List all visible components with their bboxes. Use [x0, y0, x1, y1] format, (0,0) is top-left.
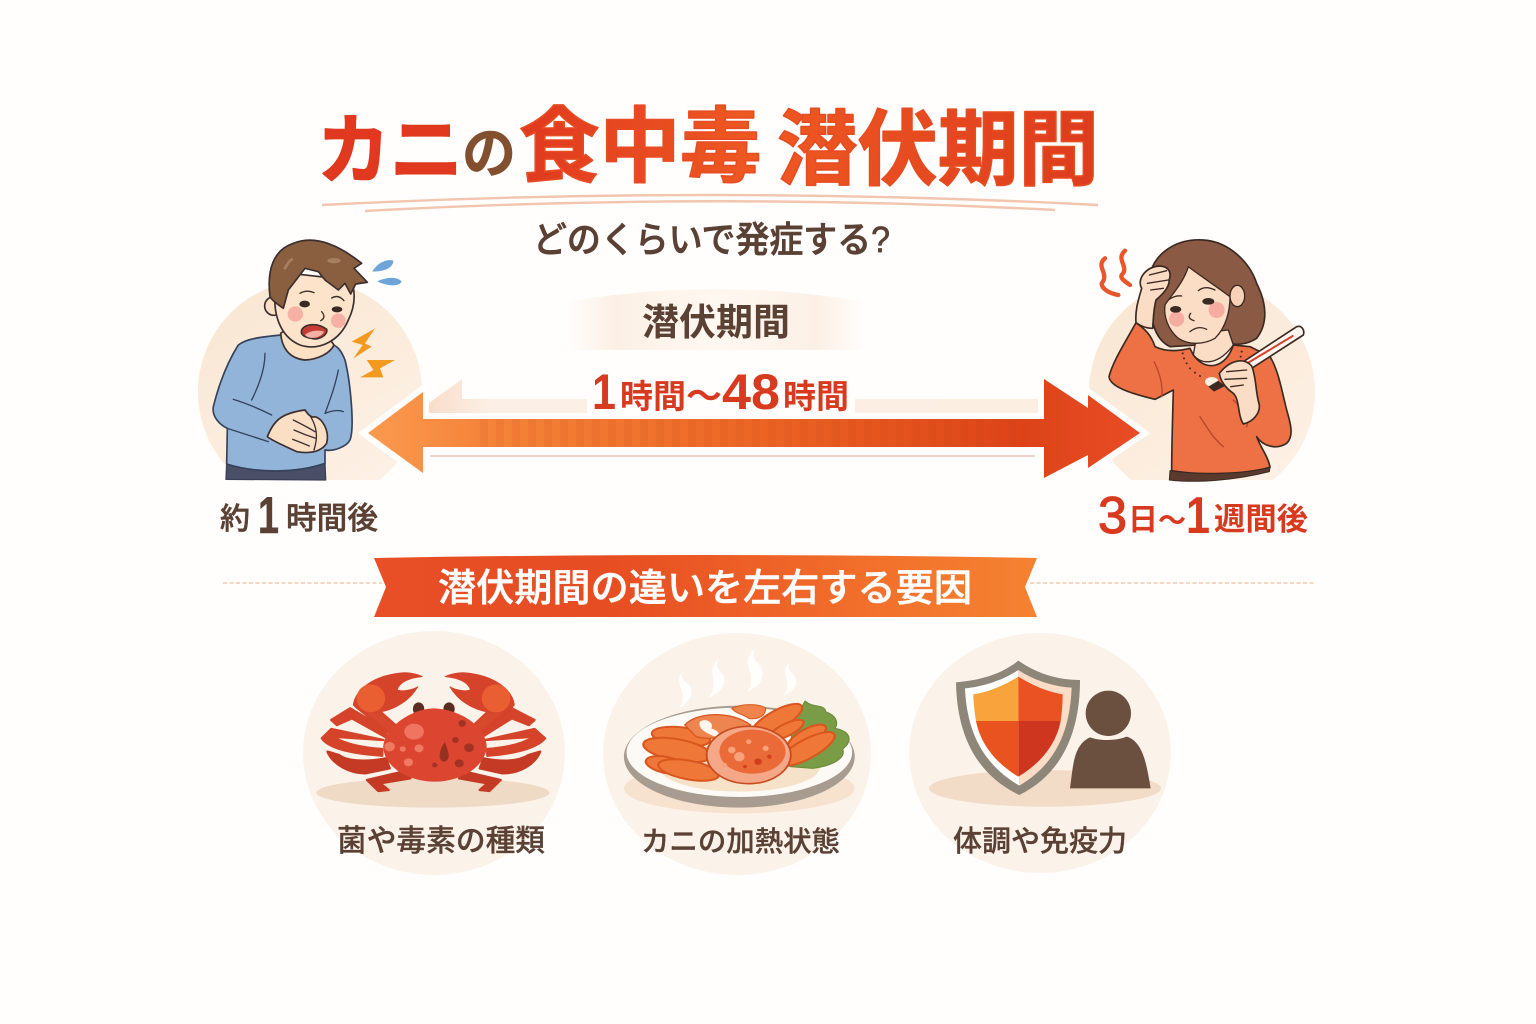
title: 食中毒	[519, 102, 761, 193]
title: 潜伏期間	[777, 105, 1099, 196]
icon: crab	[316, 673, 549, 808]
panel: right circle with woman with fever	[1089, 240, 1315, 505]
banner: factors heading: 潜伏期間の違いを左右する要因	[438, 568, 972, 610]
label: right time: ～	[1158, 505, 1186, 536]
panel: factor 1 crab	[303, 631, 565, 875]
label: left time	[220, 487, 378, 545]
subtitle: どのくらいで発症する?	[533, 219, 890, 260]
label: right time	[1098, 487, 1308, 545]
label: right time: 3	[1098, 487, 1127, 545]
duration text: 時間	[620, 378, 686, 415]
duration text: ～	[686, 378, 722, 416]
duration text: 48	[722, 364, 780, 420]
icon: crab on plate with steam	[624, 648, 855, 813]
label: bacteria and toxins: 菌や毒素の種類	[337, 825, 545, 858]
panel: left circle with man holding stomach	[198, 240, 422, 504]
arrow: main two-way arrow	[368, 379, 1140, 478]
icon: man with stomach ache	[213, 240, 402, 480]
title: の	[462, 122, 516, 185]
title: カニ	[317, 109, 463, 194]
panel: factor 3 immunity	[909, 633, 1171, 873]
label: incubation period: 潜伏期間	[642, 302, 790, 343]
panel: factor 2 heated crab	[603, 633, 871, 875]
label: incubation period	[566, 289, 866, 350]
icon: shield and person	[929, 661, 1161, 807]
arrow: faint upper arrow	[429, 379, 1044, 414]
label: left time: 1	[258, 487, 279, 545]
label: right time: 週間後	[1214, 502, 1308, 537]
label: left time: 約	[220, 503, 250, 536]
title	[317, 102, 1099, 196]
duration text: 時間	[783, 378, 849, 415]
label: physical condition and immunity: 体調や免疫力	[953, 825, 1127, 858]
duration text	[587, 364, 855, 420]
label: right time: 1	[1186, 487, 1210, 545]
label: left time: 時間後	[286, 501, 378, 536]
label: heating state: カニの加熱状態	[641, 826, 840, 857]
icon: woman with fever holding thermometer	[1101, 240, 1304, 481]
title underline	[322, 195, 1098, 211]
banner: factors heading	[374, 555, 1037, 617]
duration text: 1	[592, 364, 616, 420]
divider: dashed lines	[223, 582, 1316, 584]
line: thin pink rule under arrow	[430, 455, 1035, 457]
label: right time: 日	[1128, 504, 1158, 537]
